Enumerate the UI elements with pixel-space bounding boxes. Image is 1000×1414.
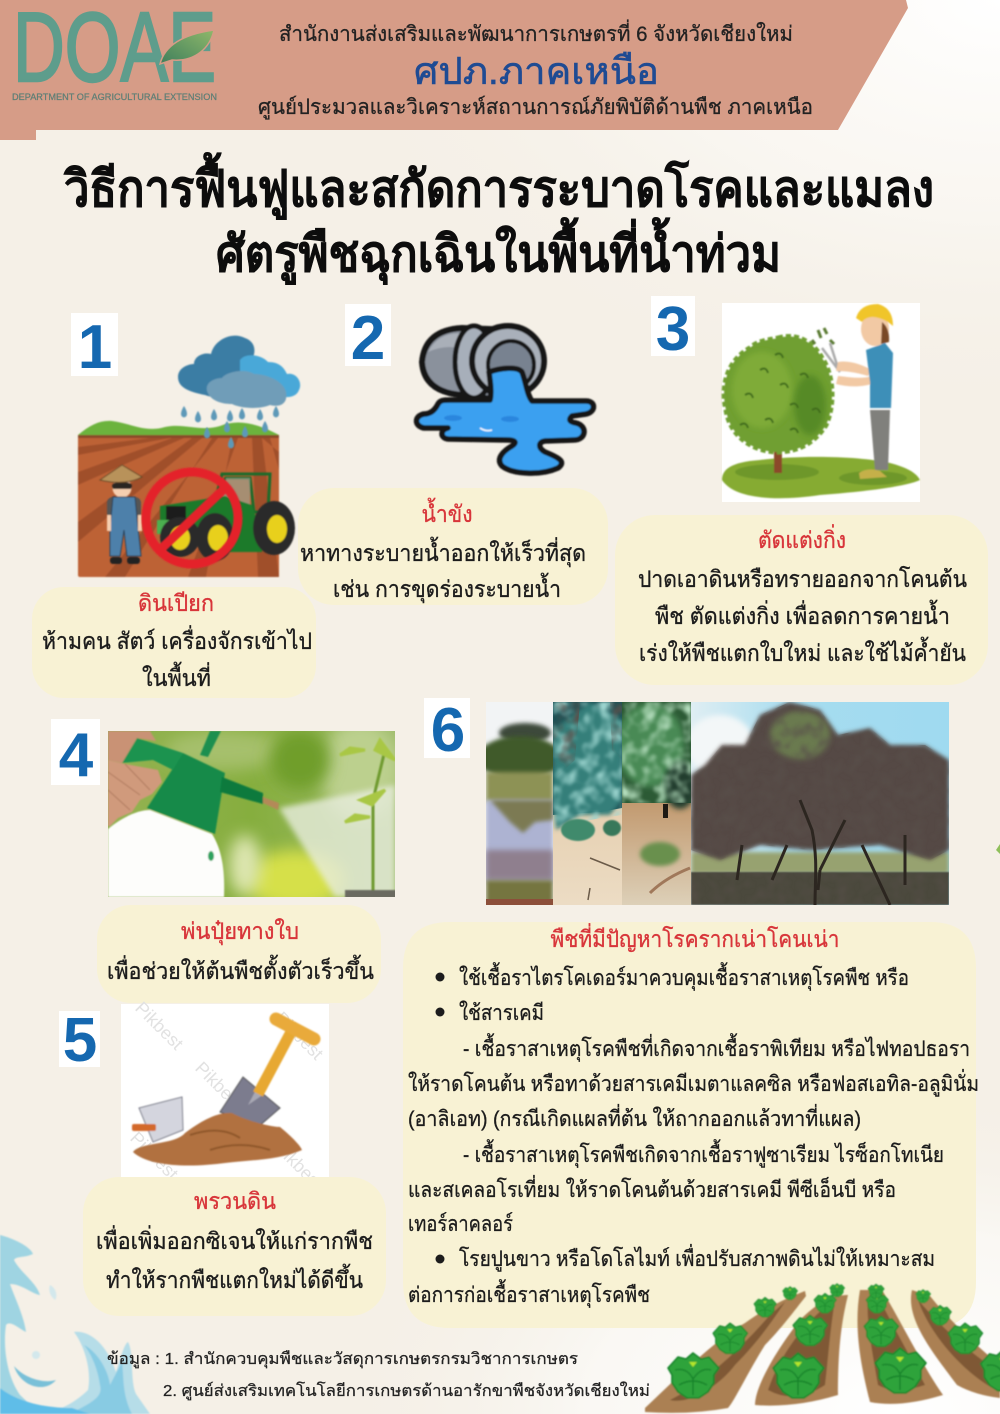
- panel 6: root rot: โรยปูนขาว หรือโดโลไมท์ เพื่อปรับสภาพดินไม่ให้เหมาะสม: [459, 1244, 935, 1272]
- panel 4: foliar fertilizer: พ่นปุ๋ยทางใบ: [181, 918, 299, 945]
- panel 2: waterlogged: [298, 488, 608, 605]
- icon: cabbages: [668, 1283, 1000, 1398]
- image: man pruning tree: [722, 303, 920, 502]
- header text: ศูนย์ประมวลและวิเคราะห์สถานการณ์ภัยพิบัติด้านพืช ภาคเหนือ: [258, 95, 813, 120]
- header banner: [0, 0, 908, 140]
- number badge 2: 2: [351, 304, 385, 373]
- title: วิธีการฟื้นฟูและสกัดการระบาดโรคและแมลง: [63, 152, 934, 220]
- panel 6: root rot: และสเคลอโรเที่ยม ให้ราดโคนต้นด้วยสารเคมี พีซีเอ็นบี หรือ: [408, 1175, 896, 1202]
- icon: prohibited sign: [146, 472, 238, 564]
- icon: farmer: [100, 465, 142, 564]
- photo: mango tree flooded: [622, 702, 691, 905]
- panel 6: root rot: ใช้เชื้อราไตรโคเดอร์มาควบคุมเชื้อราสาเหตุโรคพืช หรือ: [459, 962, 909, 991]
- water splash decoration: [0, 1235, 150, 1414]
- number badge 1: 1: [78, 313, 112, 382]
- panel 3: pruning: เร่งให้พืชแตกใบใหม่ และใช้ไม้ค้ำยัน: [639, 637, 966, 666]
- number badge 4: 4: [59, 721, 94, 790]
- panel 6: root rot: [403, 922, 979, 1328]
- panel 6: root rot: เทอร์ลาคลอร์: [408, 1212, 513, 1236]
- icon: wet field with rain, farmer and prohibited tractor: [78, 336, 300, 577]
- icon: rain cloud: [178, 336, 300, 448]
- panel 4: foliar fertilizer: เพื่อช่วยให้ต้นพืชตั้งตัวเร็วขึ้น: [107, 955, 374, 984]
- panel 6: root rot: ใช้สารเคมี: [459, 1000, 544, 1025]
- photo: dead orchard: [686, 702, 949, 905]
- panel 6: root rot: พืชที่มีปัญหาโรครากเน่าโคนเน่า: [550, 923, 840, 952]
- sprayer bottle and hand: [108, 731, 279, 897]
- sources footer: 2. ศูนย์ส่งเสริมเทคโนโลยีการเกษตรด้านอารักขาพืชจังหวัดเชียงใหม่: [163, 1381, 650, 1401]
- number badge 4: [51, 719, 100, 790]
- sources footer: ข้อมูล : 1. สำนักควบคุมพืชและวัสดุการเกษตรกรมวิชาการเกษตร: [107, 1350, 578, 1369]
- panel 5: loosen soil: พรวนดิน: [194, 1188, 276, 1214]
- header text: [258, 19, 813, 120]
- panel 2: waterlogged: เช่น การขุดร่องระบายน้ำ: [333, 573, 561, 603]
- panel 3: pruning: ปาดเอาดินหรือทรายออกจากโคนต้น: [638, 566, 967, 592]
- number badge 6: 6: [431, 696, 465, 765]
- photos: flooded orchard: [478, 702, 949, 905]
- panel 3: pruning: ตัดแต่งกิ่ง: [758, 524, 846, 553]
- plant: [340, 740, 395, 895]
- title: [63, 152, 934, 285]
- icon: logo leaf: [160, 30, 214, 64]
- image: shovel and soil: Pikbest: [126, 1128, 182, 1184]
- panel 6: root rot: ต่อการก่อเชื้อราสาเหตุโรคพืช: [408, 1279, 650, 1308]
- number badge 5: 5: [63, 1006, 97, 1075]
- photo: tree in muddy water: [553, 702, 622, 905]
- panel 1: wet soil: [32, 587, 316, 698]
- icon: pipe draining water: [416, 326, 594, 473]
- photo: flooded pond: [486, 702, 553, 905]
- title: ศัตรูพืชฉุกเฉินในพื้นที่น้ำท่วม: [216, 217, 781, 285]
- sources footer: [107, 1350, 650, 1401]
- right edge leaf: [996, 844, 1000, 854]
- panel 5: loosen soil: ทำให้รากพืชแตกใหม่ได้ดีขึ้น: [106, 1264, 363, 1293]
- panel 6: root rot: - เชื้อราสาเหตุโรคพืชเกิดจากเชื้อราฟูซาเรียม ไรซ็อกโทเนีย: [463, 1139, 944, 1168]
- panel 4: foliar fertilizer: [97, 905, 381, 1003]
- panel 1: wet soil: ในพื้นที่: [142, 662, 211, 691]
- image: shovel and soil: Pikbest: [271, 1138, 327, 1194]
- spray cone: [279, 785, 395, 897]
- image: shovel and soil: Pikbest: [191, 1058, 247, 1114]
- panel 3: pruning: พืช ตัดแต่งกิ่ง เพื่อลดการคายน้ำ: [655, 600, 950, 629]
- image: shovel and soil: Pikbest: [271, 1008, 327, 1064]
- logo: DOAE: DEPARTMENT OF AGRICULTURAL EXTENSION: [12, 92, 217, 103]
- vegetable rows decoration: [645, 1283, 1000, 1413]
- header text: สำนักงานส่งเสริมและพัฒนาการเกษตรที่ 6 จังหวัดเชียงใหม่: [279, 19, 793, 46]
- image: shovel and soil: [121, 998, 329, 1194]
- panel 3: pruning: [615, 515, 988, 685]
- panel 5: loosen soil: เพื่อเพิ่มออกซิเจนให้แก่รากพืช: [96, 1225, 373, 1254]
- header text: ศปภ.ภาคเหนือ: [414, 51, 659, 93]
- number badge 3: 3: [656, 295, 690, 364]
- panel 6: root rot: (อาลิเอท) (กรณีเกิดแผลที่ต้น ให้ถากออกแล้วทาที่แผล): [408, 1104, 861, 1131]
- panel 2: waterlogged: หาทางระบายน้ำออกให้เร็วที่สุด: [300, 537, 586, 567]
- icon: tractor: [157, 474, 295, 561]
- image: spraying foliar fertilizer: [108, 731, 395, 897]
- panel 1: wet soil: ห้ามคน สัตว์ เครื่องจักรเข้าไป: [42, 625, 312, 654]
- image: shovel and soil: Pikbest: [131, 998, 187, 1054]
- panel 2: waterlogged: น้ำขัง: [422, 498, 472, 527]
- panel 5: loosen soil: [83, 1177, 386, 1316]
- panel 1: wet soil: ดินเปียก: [138, 590, 214, 616]
